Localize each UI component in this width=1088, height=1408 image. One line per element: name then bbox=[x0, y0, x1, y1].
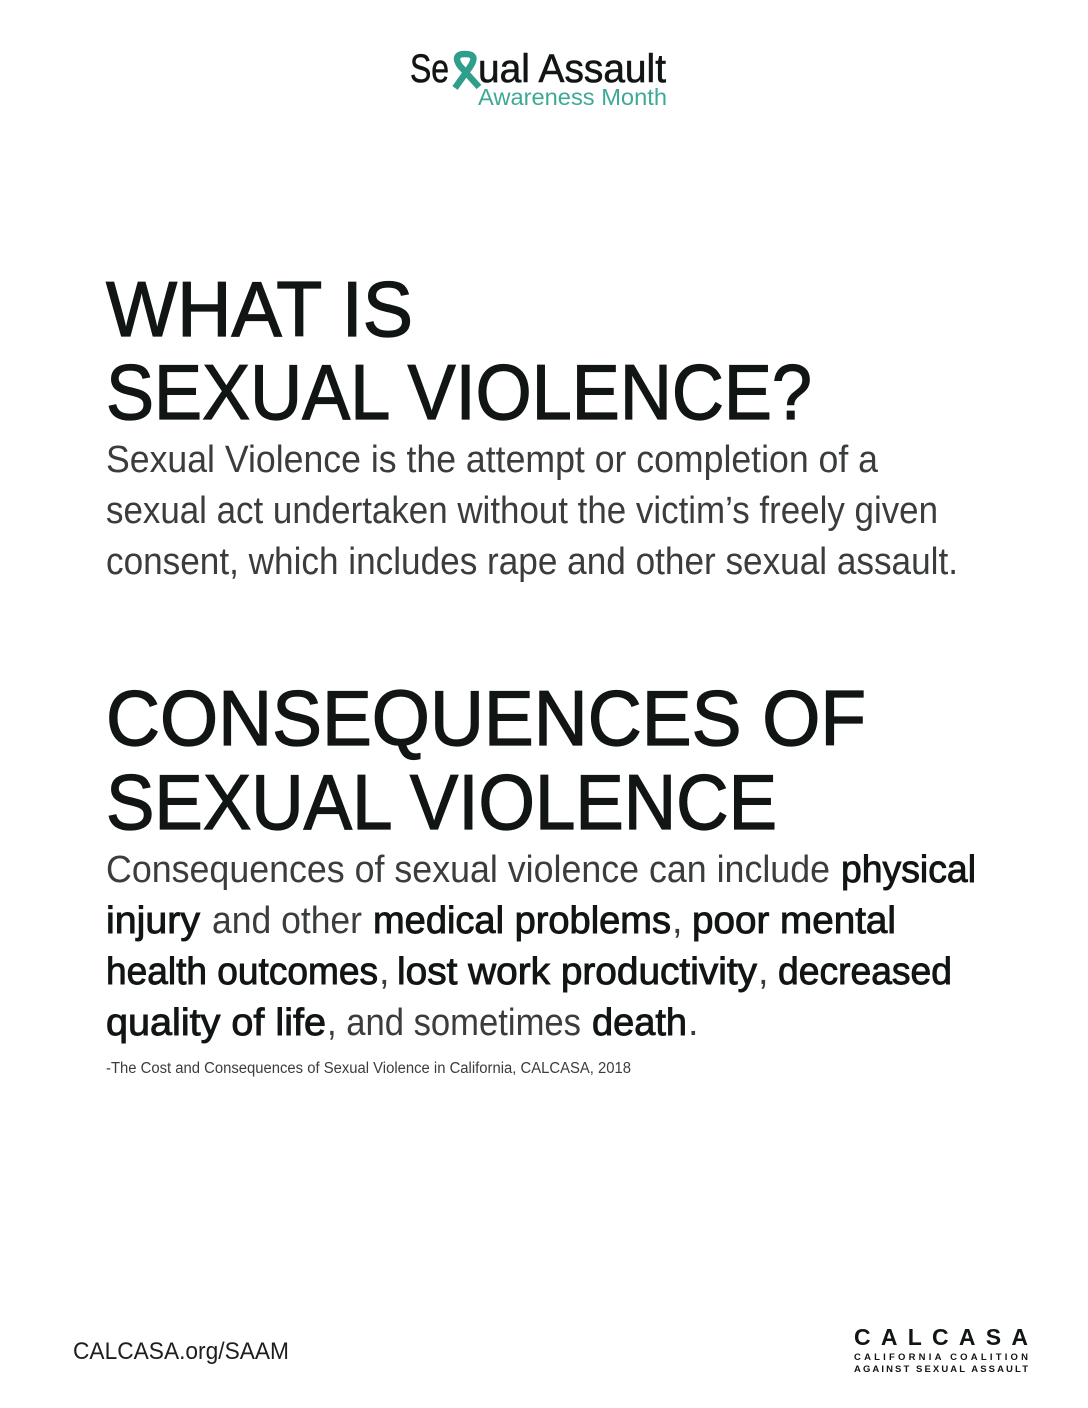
text block: definition: sexual act undertaken without the victim’s freely given bbox=[106, 490, 938, 532]
text block: consequences: , bbox=[379, 951, 390, 993]
text block: consequences: quality of life bbox=[106, 1002, 326, 1044]
text block: definition: Sexual Violence is the attempt or completion of a bbox=[106, 439, 879, 481]
text block: consequences: poor mental bbox=[692, 900, 896, 942]
text block: consequences: physical bbox=[841, 849, 976, 891]
heading: What is sexual violence: WHAT IS bbox=[106, 265, 413, 353]
logo: Sexual Assault Awareness Month bbox=[410, 47, 667, 110]
text block: consequences: injury bbox=[106, 900, 200, 942]
text block: definition bbox=[106, 439, 958, 583]
logo: Sexual Assault Awareness Month: Awareness Month bbox=[478, 84, 667, 110]
logo: CALCASA: AGAINST SEXUAL ASSAULT bbox=[854, 1364, 1028, 1375]
text block: consequences: , bbox=[758, 951, 769, 993]
logo: Sexual Assault Awareness Month: Se bbox=[410, 47, 449, 91]
text block: consequences: . bbox=[688, 1002, 699, 1044]
logo: CALCASA bbox=[854, 1324, 1028, 1375]
footer link: CALCASA.org/SAAM bbox=[73, 1338, 289, 1365]
text block: definition: consent, which includes rape and other sexual assault. bbox=[106, 541, 958, 583]
heading: What is sexual violence bbox=[106, 265, 812, 436]
text block: consequences: health outcomes bbox=[106, 951, 378, 993]
text block: consequences: lost work productivity bbox=[397, 951, 757, 993]
text block: consequences: decreased bbox=[778, 951, 952, 993]
text block: consequences: Consequences of sexual violence can include bbox=[106, 849, 830, 891]
text block: consequences: death bbox=[592, 1002, 687, 1044]
text block: consequences: medical problems bbox=[373, 900, 671, 942]
logo: CALCASA: CALCASA bbox=[854, 1324, 1028, 1350]
logo: CALCASA: CALIFORNIA COALITION bbox=[854, 1352, 1028, 1363]
heading: Consequences of sexual violence: SEXUAL VIOLENCE bbox=[106, 758, 777, 846]
text block: consequences: , and sometimes bbox=[327, 1002, 581, 1044]
citation: -The Cost and Consequences of Sexual Violence in California, CALCASA, 2018 bbox=[106, 1060, 631, 1077]
logo: Sexual Assault Awareness Month: ual Assault bbox=[478, 47, 666, 91]
heading: Consequences of sexual violence: CONSEQUENCES OF bbox=[106, 674, 866, 762]
text block: consequences bbox=[106, 849, 976, 1044]
icon: teal awareness ribbon bbox=[455, 54, 479, 88]
heading: What is sexual violence: SEXUAL VIOLENCE? bbox=[106, 348, 812, 436]
heading: Consequences of sexual violence bbox=[106, 674, 866, 846]
text block: consequences: and other bbox=[212, 900, 362, 942]
text block: consequences: , bbox=[672, 900, 683, 942]
